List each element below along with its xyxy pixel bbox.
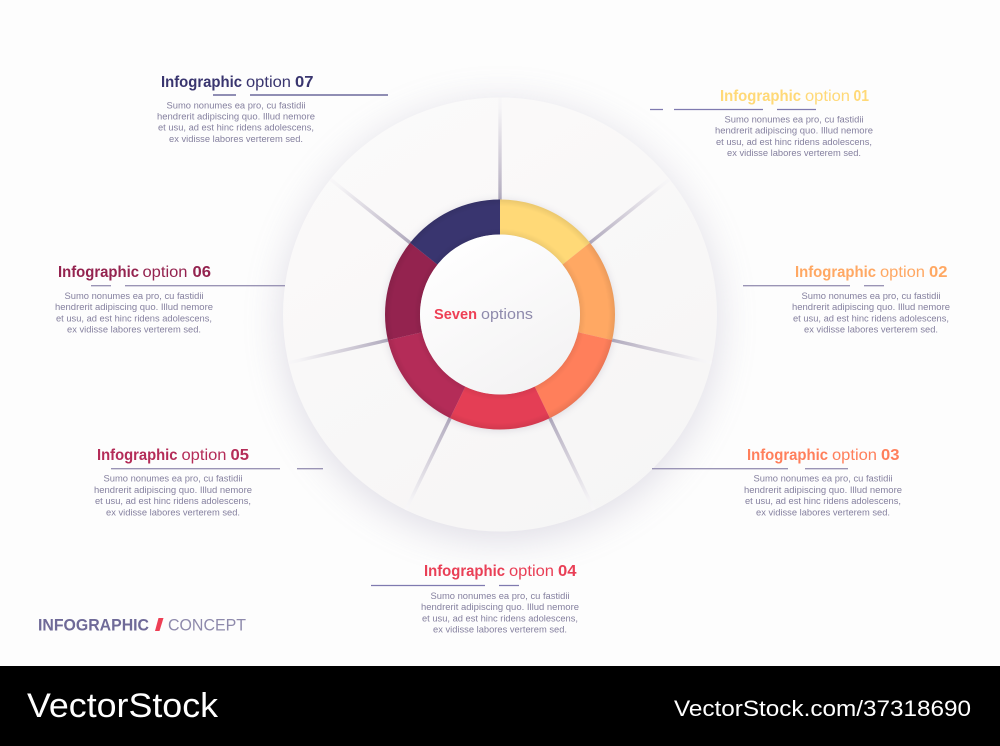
ring segment 04 — [450, 387, 550, 429]
heading 04: option — [509, 563, 554, 580]
watermark url: VectorStock.com/37318690 — [674, 696, 971, 721]
body text 02: ex vidisse labores verterem sed. — [804, 325, 938, 335]
option 07 — [157, 74, 388, 144]
option 03 — [652, 447, 902, 517]
body text 04: ex vidisse labores verterem sed. — [433, 625, 567, 635]
ring segment 06 — [385, 243, 438, 340]
heading 02: option — [880, 264, 925, 281]
body text 04: hendrerit adipiscing quo. Illud nemore — [421, 602, 579, 612]
body text 07: ex vidisse labores verterem sed. — [169, 134, 303, 144]
donut chart — [283, 98, 717, 539]
centre label: options — [481, 306, 533, 323]
body text 03: hendrerit adipiscing quo. Illud nemore — [744, 485, 902, 495]
option 05 — [94, 447, 323, 517]
leader line 04 — [371, 584, 519, 586]
ring segment 03 — [535, 332, 612, 418]
leader line 03 — [652, 468, 848, 470]
body text 07: Sumo nonumes ea pro, cu fastidii — [166, 100, 306, 110]
body text 04: et usu, ad est hinc ridens adolescens, — [422, 613, 578, 623]
option 06 — [55, 264, 285, 335]
heading 04: Infographic — [424, 563, 505, 580]
heading 05: 05 — [230, 447, 249, 464]
heading 02: Infographic — [795, 264, 876, 281]
radial spokes — [288, 98, 712, 510]
heading 03: option — [832, 447, 877, 464]
leader line 05 — [111, 468, 323, 470]
body text 05: et usu, ad est hinc ridens adolescens, — [95, 496, 251, 506]
concept label: INFOGRAPHIC — [38, 616, 149, 634]
ring segment 07 — [410, 200, 500, 265]
body text 05: Sumo nonumes ea pro, cu fastidii — [104, 474, 242, 484]
body text 03: Sumo nonumes ea pro, cu fastidii — [754, 474, 892, 484]
body text 01: Sumo nonumes ea pro, cu fastidii — [724, 114, 864, 124]
heading 05: option — [182, 447, 226, 464]
heading 04: 04 — [558, 563, 577, 580]
body text 01: et usu, ad est hinc ridens adolescens, — [716, 137, 872, 147]
leader line 01 — [650, 108, 816, 110]
body text 05: ex vidisse labores verterem sed. — [106, 507, 240, 517]
body text 06: et usu, ad est hinc ridens adolescens, — [56, 313, 212, 323]
concept label: CONCEPT — [168, 616, 246, 634]
body text 05: hendrerit adipiscing quo. Illud nemore — [94, 485, 252, 495]
heading 03: Infographic — [747, 447, 828, 464]
ring segment 02 — [562, 243, 615, 340]
body text 07: hendrerit adipiscing quo. Illud nemore — [157, 112, 315, 122]
body text 06: ex vidisse labores verterem sed. — [67, 325, 201, 335]
body text 06: Sumo nonumes ea pro, cu fastidii — [64, 291, 204, 301]
body text 03: et usu, ad est hinc ridens adolescens, — [745, 496, 901, 506]
body text 04: Sumo nonumes ea pro, cu fastidii — [430, 591, 570, 601]
body text 01: ex vidisse labores verterem sed. — [727, 148, 861, 158]
red slash — [155, 618, 164, 631]
heading 02: 02 — [929, 264, 948, 281]
watermark bar — [0, 666, 1000, 746]
body text 03: ex vidisse labores verterem sed. — [756, 507, 890, 517]
centre label: Seven — [434, 306, 477, 323]
ring segment 05 — [388, 332, 465, 418]
body text 02: hendrerit adipiscing quo. Illud nemore — [792, 302, 950, 312]
body text 02: Sumo nonumes ea pro, cu fastidii — [802, 291, 940, 301]
body text 06: hendrerit adipiscing quo. Illud nemore — [55, 302, 213, 312]
option 02 — [743, 264, 950, 335]
body text 02: et usu, ad est hinc ridens adolescens, — [793, 313, 949, 323]
centre circle — [420, 234, 580, 394]
outer disk — [283, 98, 717, 532]
leader line 02 — [743, 285, 884, 287]
option 04 — [371, 563, 579, 635]
watermark logo: VectorStock — [27, 687, 219, 725]
body text 01: hendrerit adipiscing quo. Illud nemore — [715, 126, 873, 136]
heading 05: Infographic — [97, 447, 178, 464]
heading 07: 07 — [295, 74, 314, 91]
concept label — [38, 616, 246, 634]
ring segment 01 — [500, 200, 590, 265]
heading 07: Infographic — [161, 74, 242, 91]
disk drop shadow — [283, 105, 717, 539]
body text 07: et usu, ad est hinc ridens adolescens, — [158, 123, 314, 133]
heading 06: 06 — [192, 264, 211, 281]
heading 01: 01 — [854, 88, 869, 105]
heading 03: 03 — [881, 447, 900, 464]
heading 01: Infographic — [720, 88, 801, 105]
heading 06: Infographic — [58, 264, 139, 281]
heading 06: option — [142, 264, 188, 281]
option 01 — [650, 88, 873, 158]
heading 01: option — [805, 88, 850, 105]
ring bevel — [402, 217, 598, 412]
leader line 07 — [213, 94, 388, 96]
leader line 06 — [91, 285, 285, 287]
ring shadow — [385, 200, 615, 430]
heading 07: option — [246, 74, 291, 91]
